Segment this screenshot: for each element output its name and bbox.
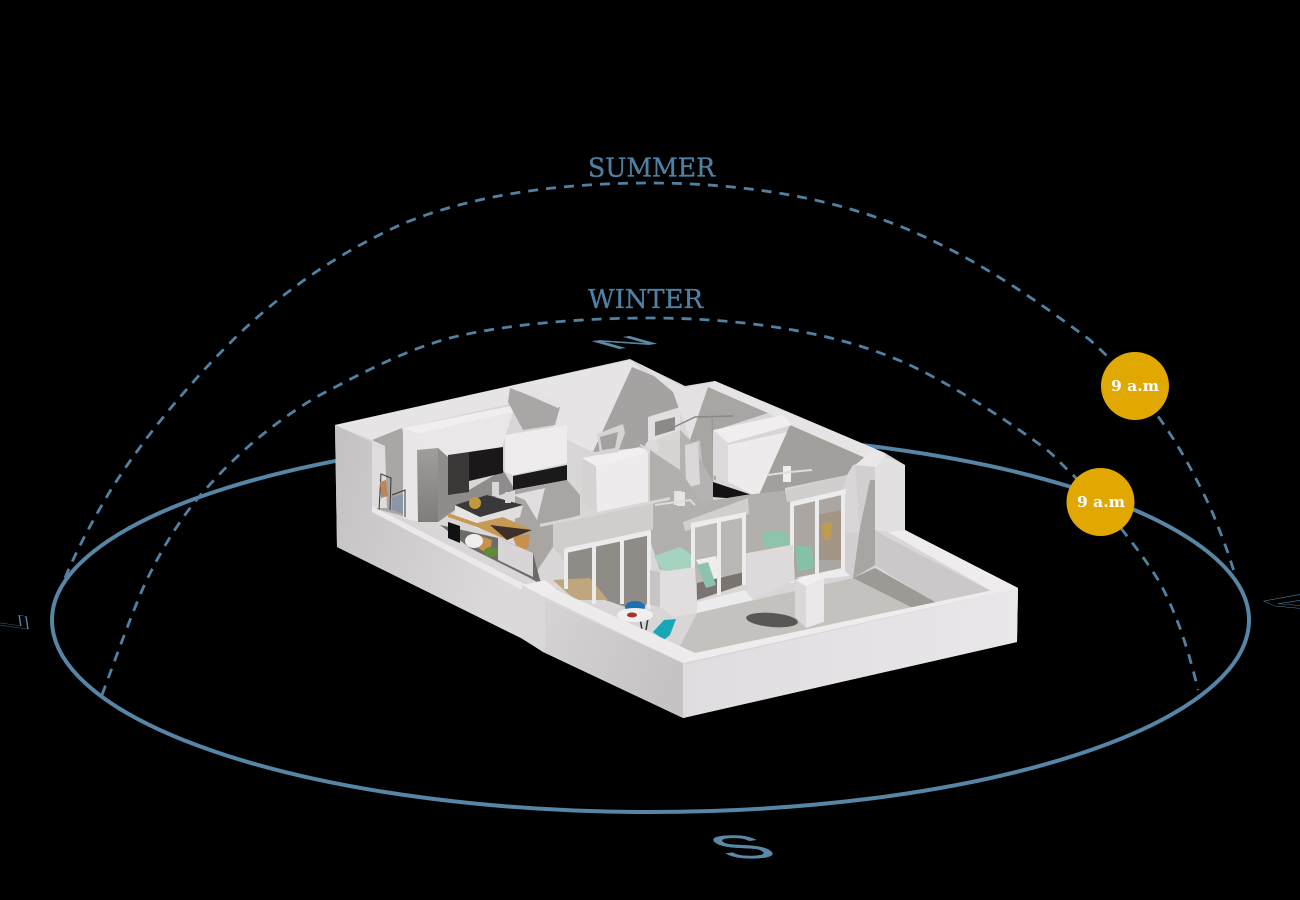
chairs	[478, 535, 492, 555]
front pillar	[521, 580, 557, 652]
low wall 2	[747, 545, 795, 600]
backsplash	[469, 447, 503, 481]
wall cap south-east	[683, 586, 1018, 663]
fridge	[417, 448, 438, 522]
wall cap south-west	[545, 590, 695, 663]
winter sun path	[102, 318, 1198, 695]
black strip	[513, 465, 567, 490]
room 1 interior floor	[650, 450, 790, 570]
bedroom 3	[760, 466, 847, 583]
column shadow	[745, 611, 799, 629]
wall cabinets	[403, 405, 515, 434]
blue pouf	[625, 601, 645, 613]
upper box	[508, 388, 560, 430]
oven	[448, 452, 469, 495]
terrace wall cap	[888, 530, 1018, 592]
outer south-east wall	[683, 588, 1018, 718]
tall panel	[438, 448, 515, 522]
living room low wall and glazing	[540, 491, 682, 612]
wall shadow	[853, 568, 937, 608]
right kitchen block	[582, 440, 680, 530]
sill	[697, 590, 753, 613]
summer sun path	[65, 183, 1236, 578]
table	[640, 618, 648, 630]
silhouette	[335, 359, 1018, 718]
patio furniture	[617, 601, 676, 640]
terrace inner wall	[875, 530, 993, 603]
label: summer: SUMMER	[588, 154, 716, 184]
outer left wall	[335, 425, 522, 638]
pendant lamps	[492, 482, 499, 496]
low wall 1	[660, 567, 697, 617]
dining floor	[440, 525, 585, 610]
column	[795, 580, 806, 628]
sun marker: winter 9 a.m	[1066, 468, 1134, 536]
lamp dome	[465, 534, 483, 548]
partition frames	[597, 407, 680, 460]
clothes rack	[379, 474, 405, 517]
back wall caps and lit walls	[335, 360, 885, 508]
low panels	[498, 538, 533, 577]
compass: north: N	[579, 333, 670, 352]
dining table	[448, 513, 532, 540]
wall cap left	[372, 506, 545, 598]
fan living room	[674, 491, 682, 505]
bedroom 2	[654, 492, 749, 602]
fan bedroom 2	[655, 492, 695, 506]
floor under counters	[515, 480, 580, 577]
apartment model	[335, 359, 1018, 718]
terrace	[650, 530, 1018, 653]
terrace floor	[678, 578, 937, 653]
ground ring	[52, 433, 1249, 812]
sun marker: summer 9 a.m: 9 a.m	[1111, 377, 1159, 395]
plant	[484, 547, 498, 557]
corner cabinet	[505, 425, 567, 475]
kitchen rear wall	[372, 428, 417, 522]
teal chair	[653, 619, 676, 640]
island	[455, 505, 480, 530]
wardrobe bedroom 2	[713, 415, 870, 530]
outer south-west wall	[545, 600, 683, 718]
compass: south: S	[695, 828, 789, 866]
bathroom	[668, 416, 733, 500]
fan bedroom 3	[768, 466, 812, 482]
label: winter: WINTER	[588, 285, 704, 315]
kitchen	[372, 382, 585, 610]
tv	[713, 482, 758, 525]
ceiling fan living	[640, 440, 672, 460]
sun marker: winter 9 a.m: 9 a.m	[1077, 493, 1125, 511]
right pillar block	[845, 451, 905, 578]
sun marker: summer 9 a.m	[1101, 352, 1169, 420]
